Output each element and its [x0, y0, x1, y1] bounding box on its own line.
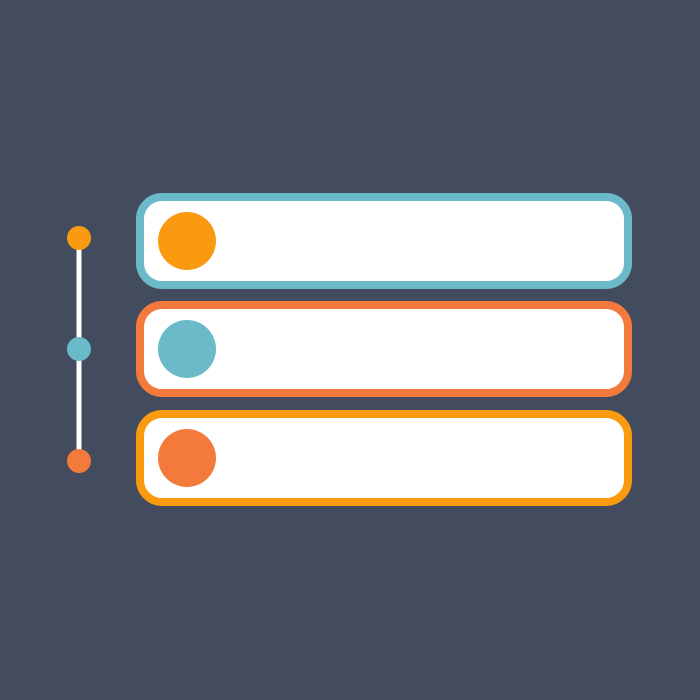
timeline dot 3 [67, 449, 91, 473]
timeline dot 1 [67, 226, 91, 250]
panel 2 [140, 305, 628, 393]
timeline [67, 226, 91, 473]
panel 1 [140, 197, 628, 285]
icon circle 2 [158, 320, 216, 378]
icon circle 1 [158, 212, 216, 270]
panel 3 [140, 414, 628, 502]
timeline dot 2 [67, 337, 91, 361]
icon circle 3 [158, 429, 216, 487]
